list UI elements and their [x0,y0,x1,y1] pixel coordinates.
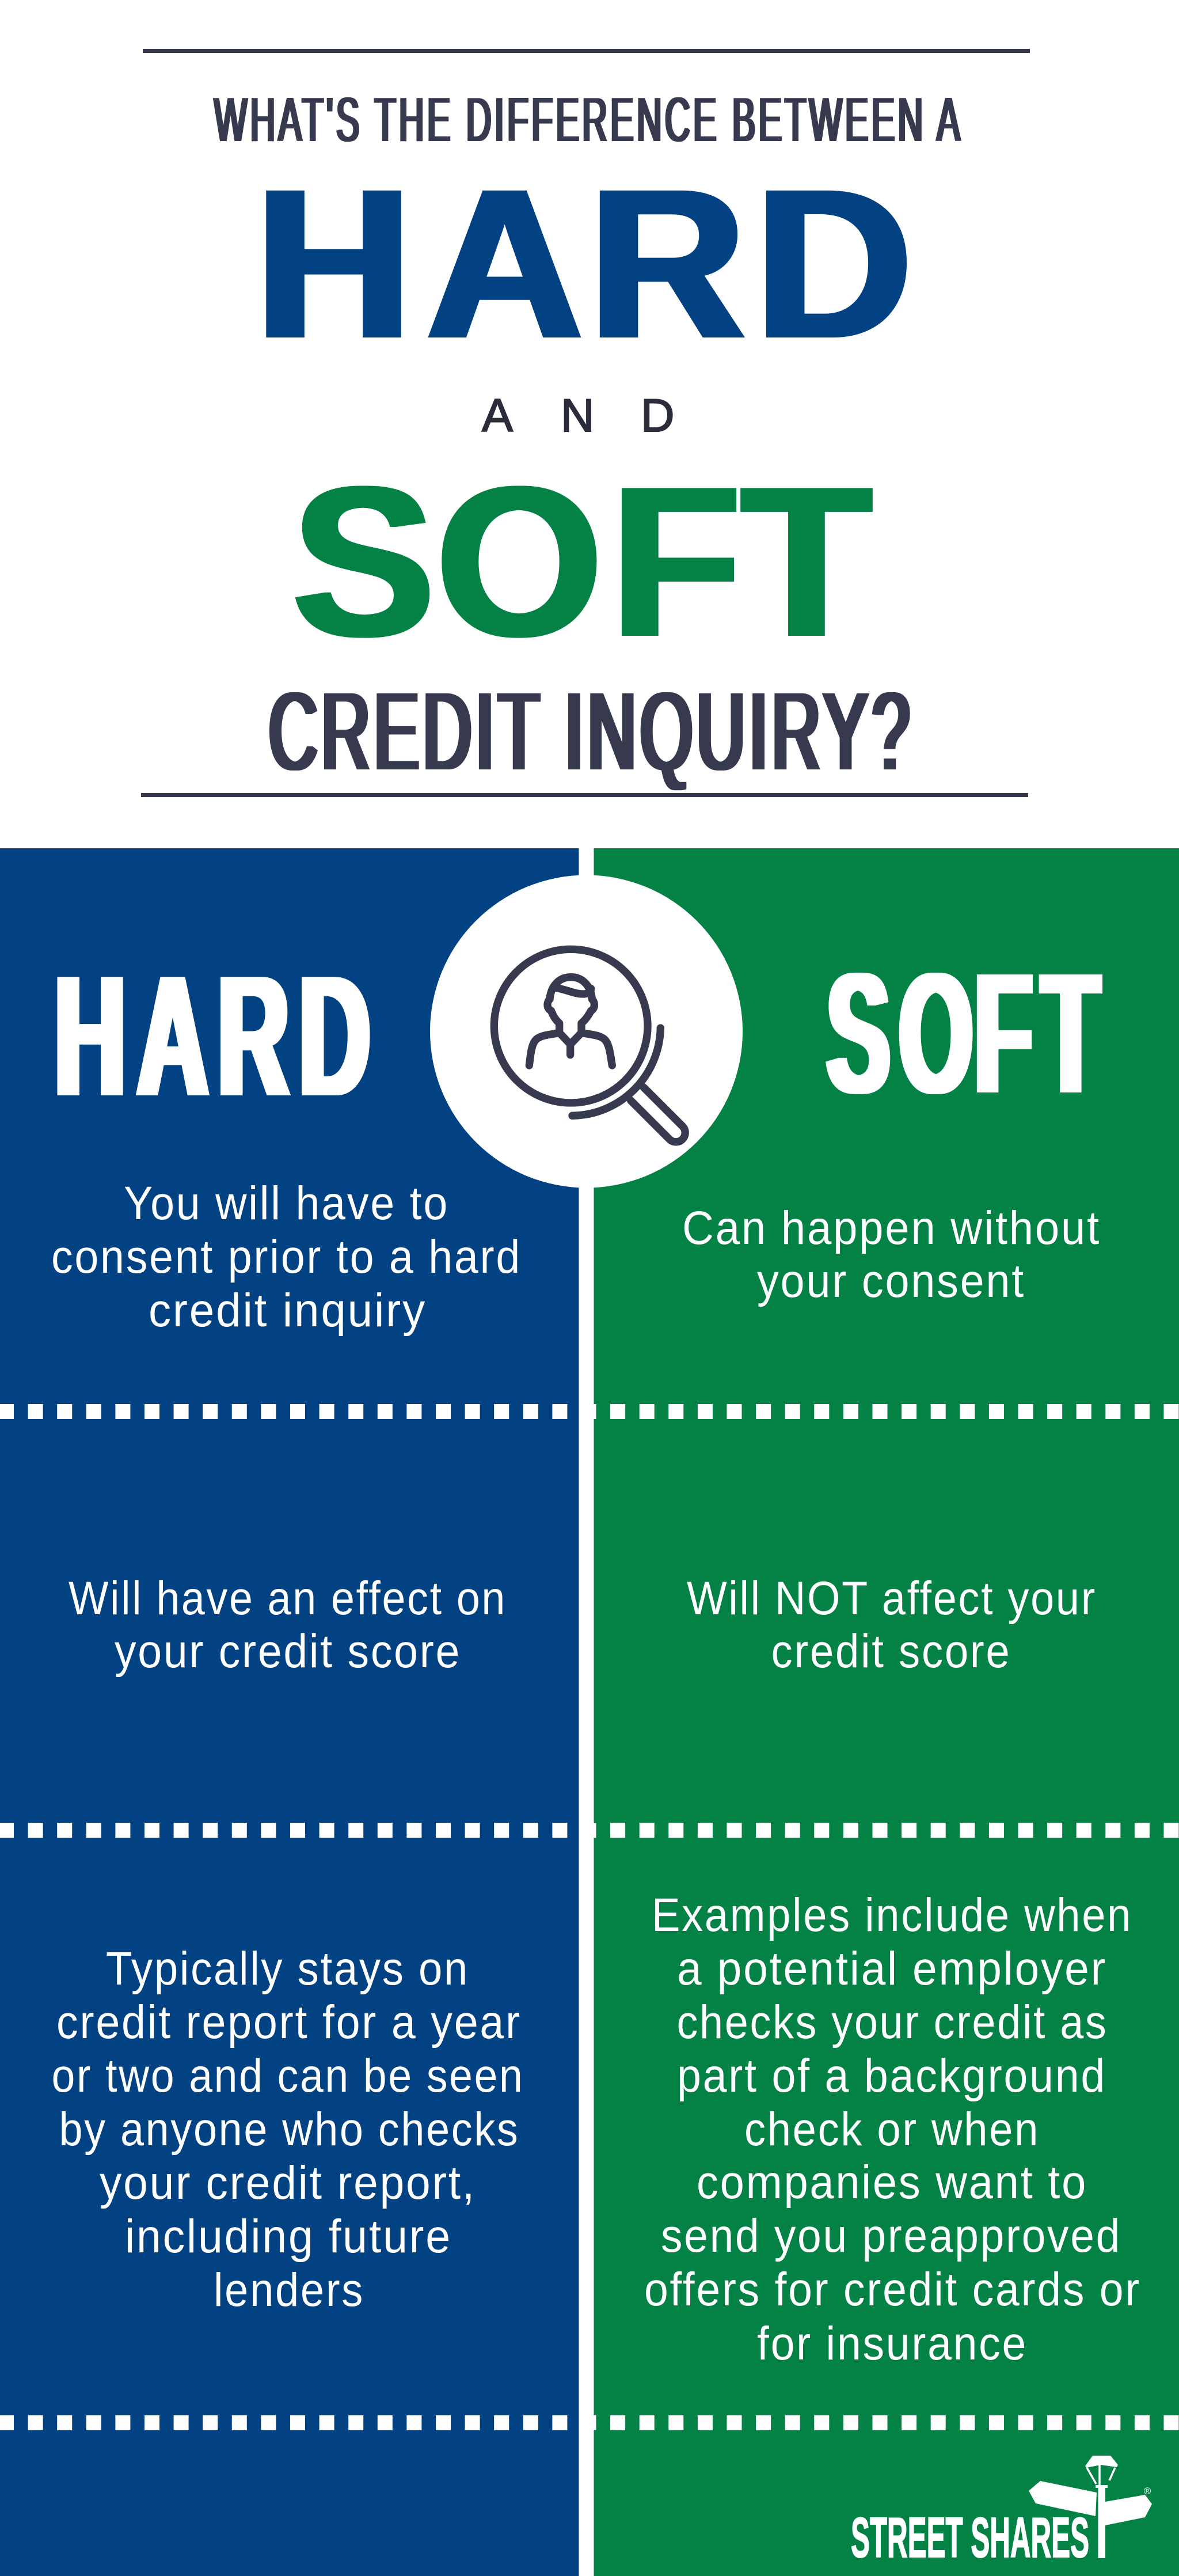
text: report duration: lenders [214,2264,364,2316]
text: examples: checks your credit as [677,1996,1108,2048]
text: report duration: your credit report, [100,2157,476,2209]
text: consent: consent prior to a hard [51,1231,522,1283]
panel: soft inquiry [594,848,1179,2576]
registered mark: ® [1144,2486,1151,2497]
text: score effect: Will have an effect on [69,1572,507,1625]
text: score effect [69,1572,507,1678]
text: examples: a potential employer [677,1943,1107,1995]
heading: SOFT: SOFT [292,442,872,682]
text: no score effect: Will NOT affect your [687,1572,1097,1625]
text: report duration: Typically stays on [106,1943,469,1995]
icon: magnifying glass with person [494,949,689,1145]
center circle badge [430,875,743,1188]
text: report duration: or two and can be seen [52,2050,524,2102]
text: report duration [52,1943,524,2316]
text: examples: check or when [744,2103,1040,2156]
heading: HARD: HARD [255,145,912,383]
text: no score effect: credit score [771,1625,1011,1678]
text: report duration: credit report for a year [56,1996,522,2048]
column heading: HARD: HARD [55,940,370,1132]
panel: hard inquiry [0,848,579,2576]
title block [141,49,1030,797]
text: without consent: your consent [757,1255,1025,1307]
text: consent: credit inquiry [149,1284,427,1337]
logo: StreetShares [851,2456,1152,2569]
text: without consent [682,1202,1101,1307]
text: consent [51,1177,522,1337]
text: without consent: Can happen without [682,1202,1101,1254]
text: examples: send you preapproved [661,2210,1121,2262]
text: examples: part of a background [677,2050,1106,2102]
column heading: SOFT: SOFT [827,937,1100,1129]
text: report duration: including future [125,2210,452,2263]
logo icon: street sign and lamp [1029,2456,1152,2558]
text: examples [644,1889,1141,2370]
text: examples: offers for credit cards or [644,2263,1141,2316]
heading: AND: AND [482,390,675,442]
text: examples: Examples include when [652,1889,1132,1941]
text: consent: You will have to [124,1177,449,1230]
text: no score effect [687,1572,1097,1678]
text: examples: companies want to [697,2156,1087,2209]
text: report duration: by anyone who checks [59,2103,519,2156]
text: examples: for insurance [757,2317,1028,2370]
text: score effect: your credit score [115,1625,461,1678]
